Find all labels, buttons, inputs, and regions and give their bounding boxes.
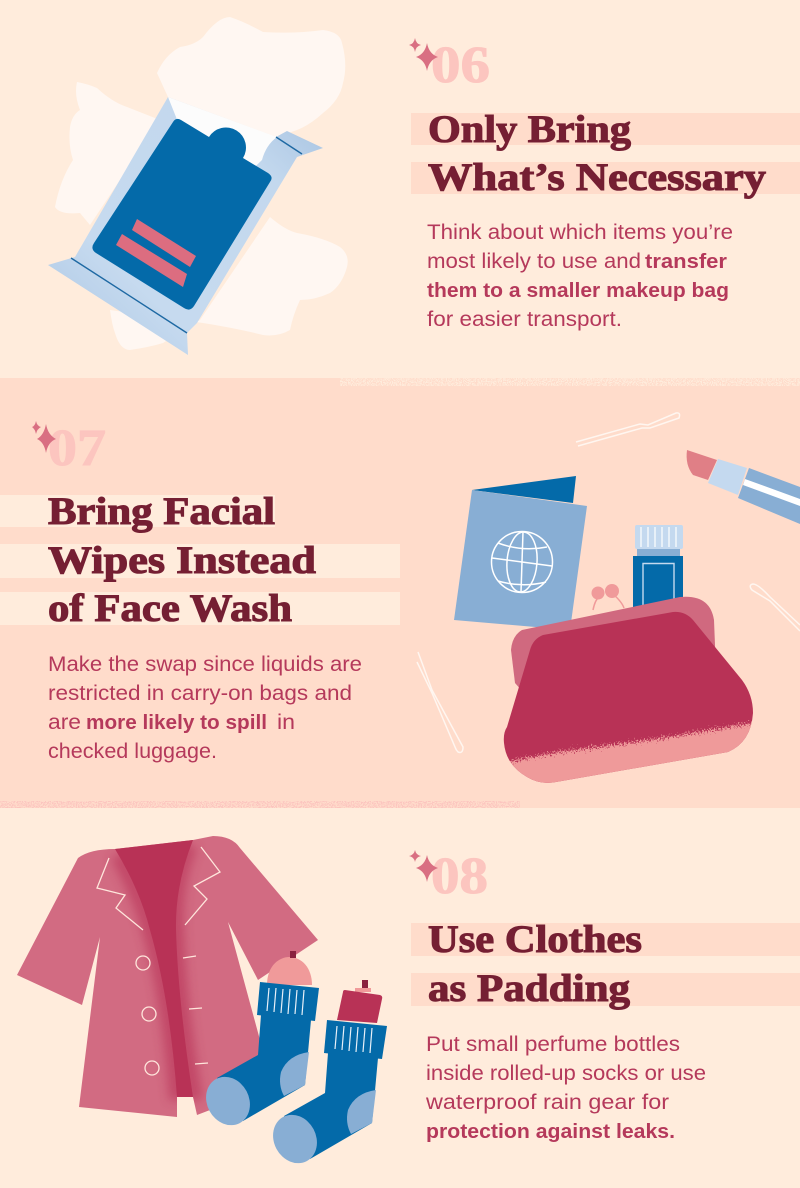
wipes cloud: [55, 17, 348, 350]
heading 07: Wipes Instead: [48, 539, 316, 582]
passport front: [454, 490, 587, 630]
section 1 background: [0, 0, 800, 378]
illustration: purse, passport, lipstick, pins: [417, 413, 800, 790]
number 08: 08: [431, 848, 488, 905]
text block 06: them to a smaller makeup bag: [427, 279, 729, 302]
number 06: [409, 37, 490, 94]
sparkles: [409, 850, 438, 882]
blue label card: [92, 119, 272, 310]
heading 06: [428, 108, 767, 199]
heading 08: Use Clothes: [428, 918, 642, 961]
sparkles: [32, 421, 56, 453]
text block 07: in: [277, 710, 295, 734]
heading 08: as Padding: [428, 967, 631, 1010]
wipes pack body: [48, 97, 323, 355]
text block 08: protection against leaks.: [426, 1120, 675, 1143]
text block 08: inside rolled-up socks or use: [426, 1061, 706, 1085]
text block 08: Put small perfume bottles: [426, 1032, 680, 1056]
pack opening with white wipe: [168, 97, 277, 195]
heading 07: of Face Wash: [48, 587, 292, 630]
number 06: 06: [431, 37, 490, 94]
text block 07: checked luggage.: [48, 739, 217, 763]
illustration: coat: [17, 836, 318, 1117]
text block 06: Think about which items you’re: [427, 220, 733, 244]
pack seam lines: [71, 137, 302, 333]
text block 07: restricted in carry-on bags and: [48, 681, 352, 705]
heading bands 07: [0, 495, 400, 625]
purse clasp: [592, 584, 624, 610]
pink label bars: [116, 219, 196, 287]
text block 07: more likely to spill: [86, 711, 267, 734]
heading bands 06: [411, 113, 800, 194]
text block 06: most likely to use and: [427, 249, 641, 273]
text block 06: for easier transport.: [427, 307, 622, 331]
heading 06: Only Bring: [428, 108, 632, 151]
lipstick: [687, 450, 800, 524]
purse back flap: [511, 597, 716, 700]
lapel stitching: [97, 847, 220, 1075]
section 3 background: [0, 808, 800, 1188]
heading 07: Bring Facial: [48, 490, 275, 533]
sparkles: [409, 38, 438, 71]
text block 06: transfer: [645, 250, 727, 273]
passport globe: [492, 531, 552, 593]
illustration: sock with pink bottle: [198, 951, 319, 1133]
heading 08: [428, 918, 642, 1010]
text block 07: Make the swap since liquids are: [48, 652, 362, 676]
purse front: [500, 612, 760, 790]
illustration: sock with red bottle: [265, 980, 387, 1171]
section 2 background: [0, 378, 800, 808]
heading bands 08: [411, 923, 800, 1006]
small bottle: [633, 525, 683, 611]
bobby pins: [417, 413, 800, 752]
passport back cover: [472, 476, 576, 503]
grainy section edges: [0, 378, 800, 808]
text block 08: waterproof rain gear for: [425, 1090, 669, 1114]
number 07: 07: [48, 420, 106, 477]
heading 07: [48, 490, 316, 630]
illustration: facial wipes pack: [48, 17, 348, 355]
coat inner: [115, 840, 193, 1097]
number 08: [409, 848, 488, 905]
coat lapel shading: [118, 845, 195, 1100]
heading 06: What’s Necessary: [428, 156, 767, 199]
text block 07: are: [48, 710, 81, 734]
